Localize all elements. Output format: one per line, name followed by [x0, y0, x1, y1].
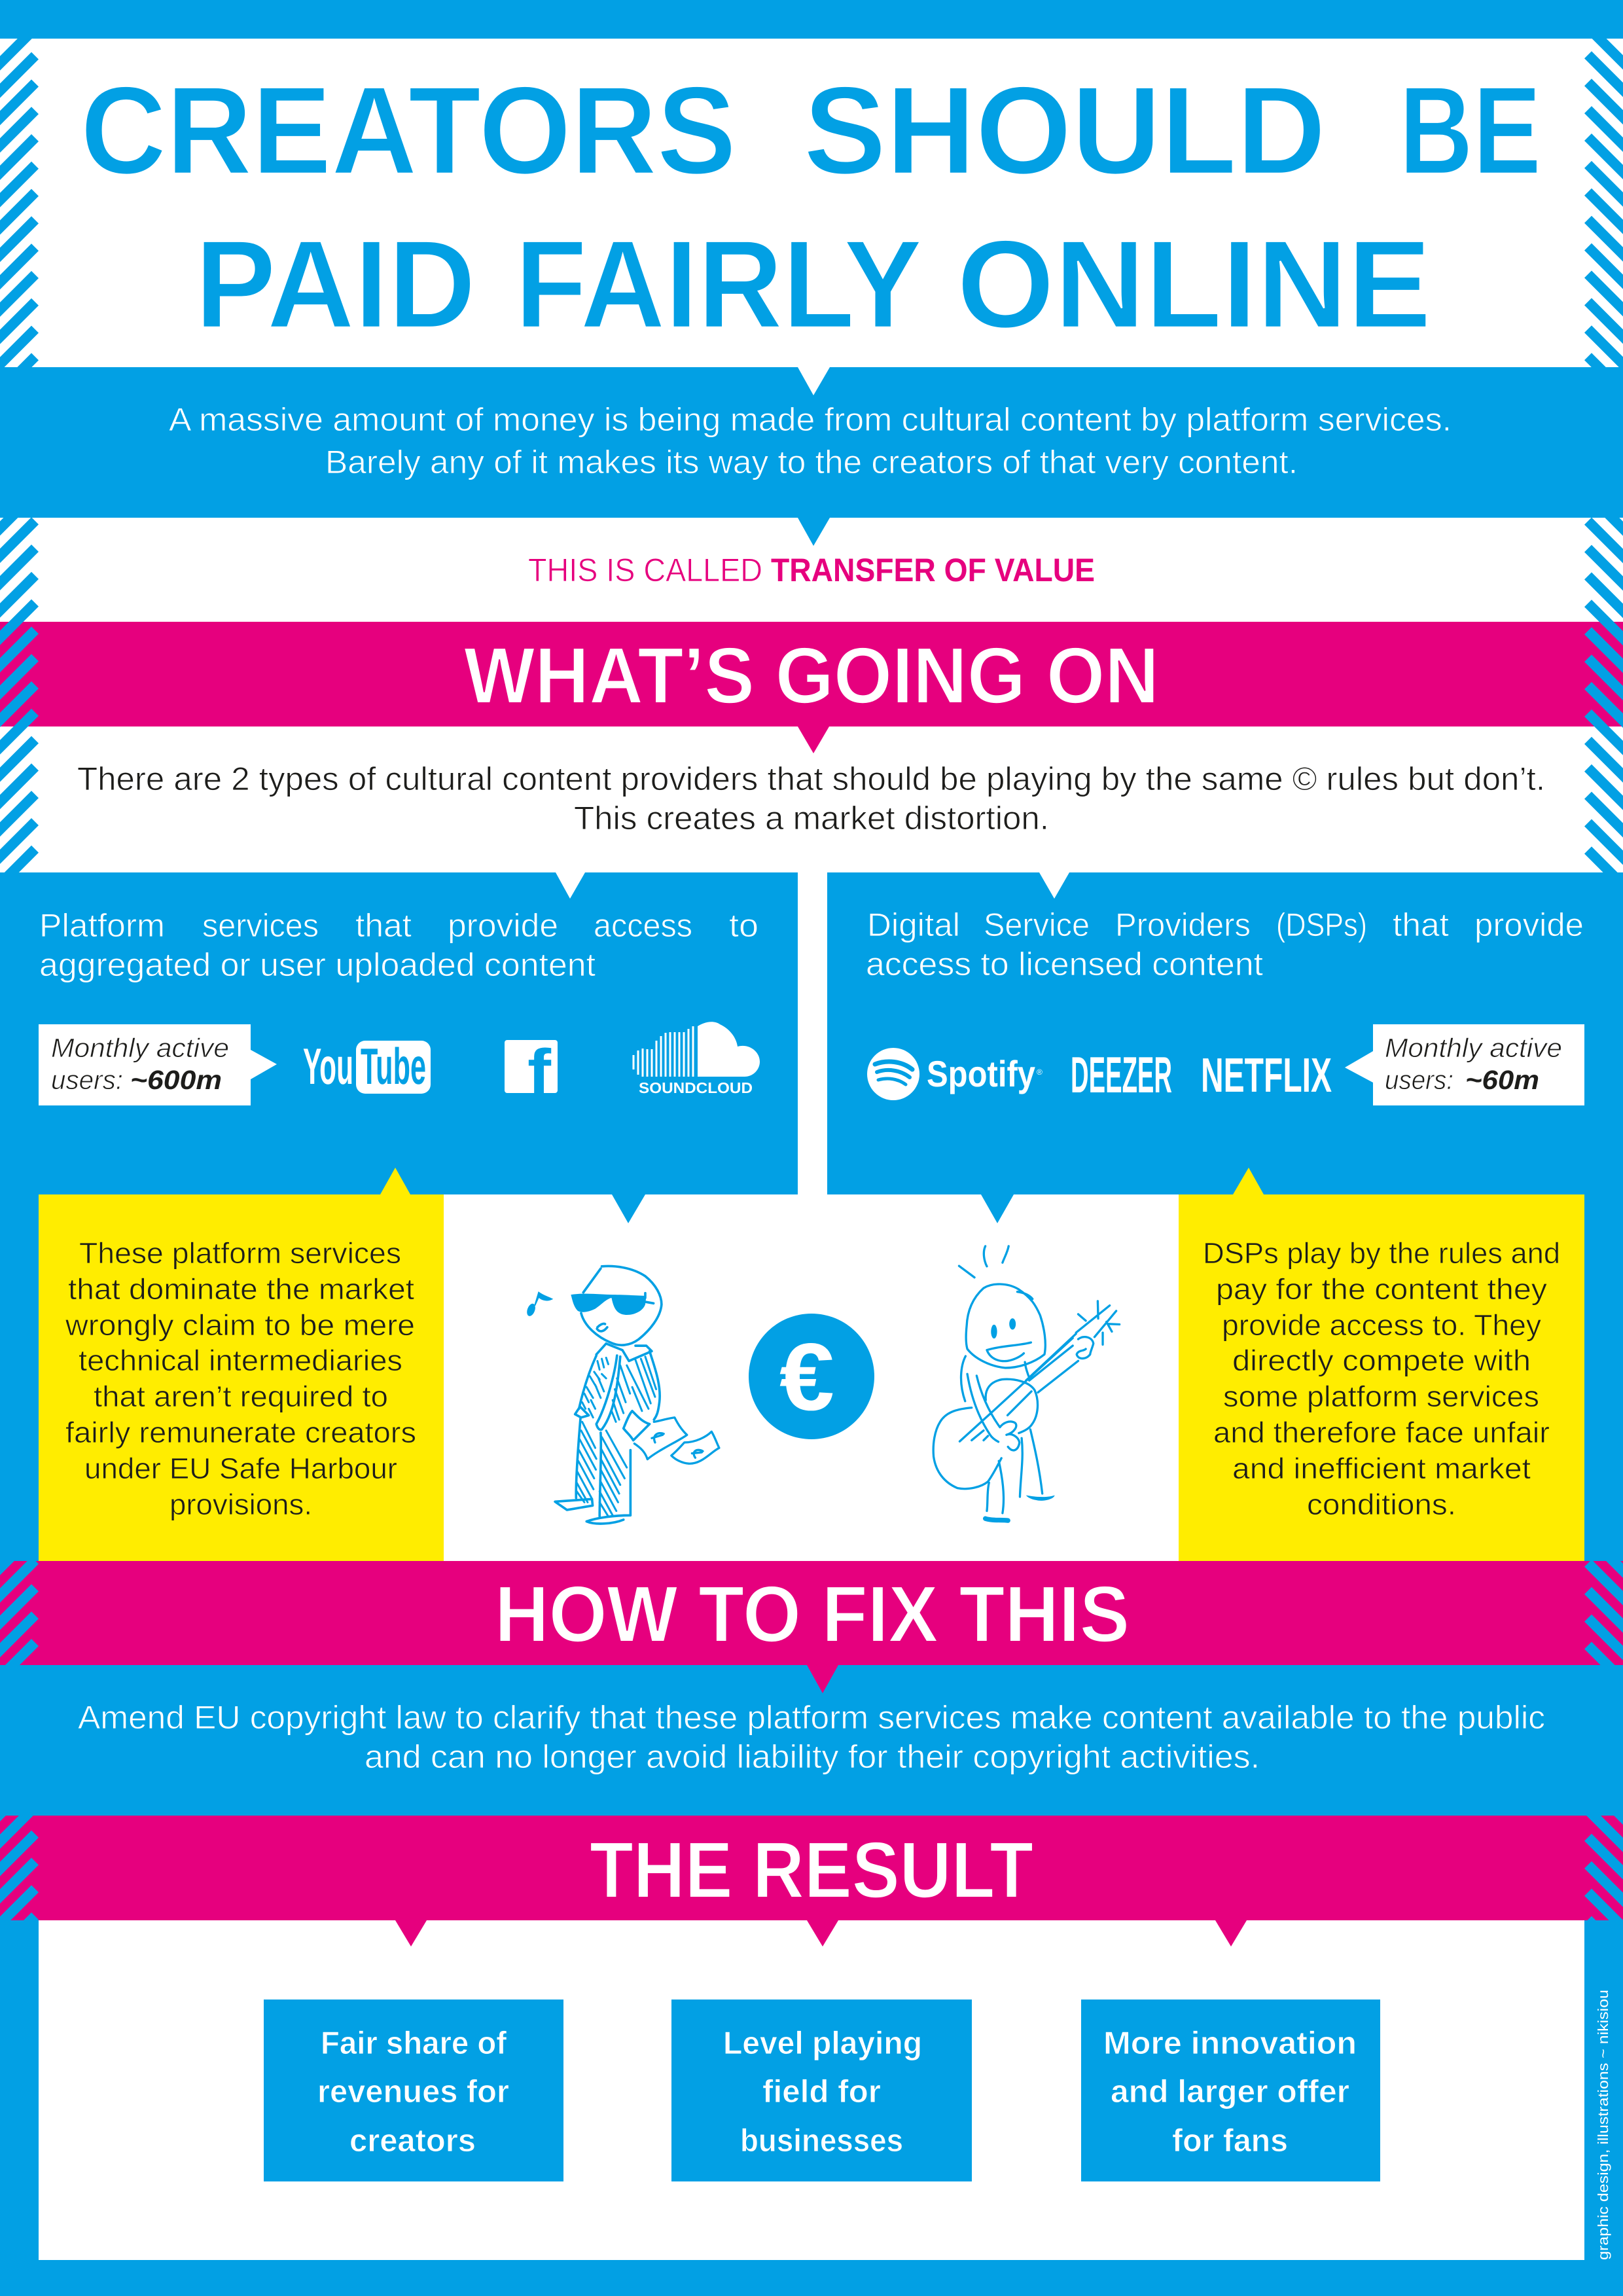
text: DSP description [866, 906, 1584, 982]
callout: monthly active users 60m: Monthly active [1385, 1033, 1562, 1063]
arrow: title notch [798, 367, 830, 395]
panel: transfer of value [0, 518, 1623, 622]
arrow: DSP to character [981, 1194, 1014, 1223]
result box: more innovation: More innovation [1103, 2026, 1357, 2061]
heading: title line 1: CREATORS [80, 61, 736, 200]
icon: facebook logo: f [527, 1037, 552, 1107]
text: two types: There are 2 types of cultural content providers that should be playing by the same © rules but don’t. [77, 761, 1545, 797]
panel: digital service providers: DEEZER [1071, 1046, 1172, 1103]
text: DSP description: Providers [1115, 906, 1251, 943]
text: platforms claim: These platform services [79, 1236, 401, 1270]
text: platform services description: services [202, 907, 319, 944]
text: DSP description: that [1393, 906, 1449, 943]
text: DSPs play by the rules [1203, 1236, 1560, 1521]
text: amend EU copyright law: and can no longer avoid liability for their copyright activities. [365, 1738, 1260, 1775]
callout: monthly active users 600m: Monthly active [51, 1033, 229, 1063]
heading: title line 2 [195, 215, 1431, 354]
result box: level playing field: businesses [740, 2123, 903, 2159]
band: what's going on [0, 622, 1623, 726]
panel: two types text [0, 726, 1623, 872]
result box: more innovation: and larger offer [1111, 2074, 1349, 2109]
text: platform services description: aggregated or user uploaded content [39, 946, 596, 983]
band: how to fix this: HOW TO FIX THIS [495, 1570, 1130, 1659]
heading: title line 1: SHOULD [804, 61, 1326, 200]
text: DSPs play by the rules: and inefficient market [1232, 1452, 1531, 1485]
icon: spotify logo: Spotify [927, 1053, 1035, 1094]
text: DSP description: (DSPs) [1276, 906, 1367, 943]
panel: centre white gap [444, 872, 1179, 1561]
heading: title line 2: ONLINE [957, 215, 1431, 354]
text: DSPs play by the rules: and therefore face unfair [1213, 1416, 1550, 1449]
text: DSPs play by the rules: DSPs play by the rules and [1203, 1236, 1560, 1270]
callout: monthly active users 600m: ~600m [130, 1065, 222, 1095]
icon: euro coin [749, 1314, 874, 1439]
panel: digital service providers [827, 872, 1623, 1194]
text: platform services description: provide [448, 907, 558, 944]
panel: intro band [0, 367, 1623, 518]
text: transfer of value [528, 552, 1095, 588]
text: platforms claim: under EU Safe Harbour [84, 1452, 397, 1485]
text: intro: Barely any of it makes its way to the creators of that very content. [325, 444, 1298, 480]
text: amend EU copyright law: Amend EU copyright law to clarify that these platform services make content available to the public [78, 1699, 1545, 1736]
panel: platform services [0, 872, 798, 1194]
result box: fair share: revenues for [317, 2074, 509, 2109]
text: DSPs play by the rules: pay for the content they [1216, 1272, 1548, 1306]
text: intro [169, 401, 1452, 480]
arrow: platform to character [612, 1194, 645, 1223]
band: what's going on: WHAT’S GOING ON [464, 631, 1159, 720]
credit line: graphic design, illustrations ~ nikisiou [1595, 1990, 1611, 2260]
callout: monthly active users 60m: ~60m [1465, 1065, 1539, 1095]
arrow: fix pointer [807, 1665, 838, 1693]
result box: level playing field: Level playing [723, 2026, 922, 2061]
icon: spotify logo [867, 1048, 1043, 1100]
text: DSP description: Service [984, 906, 1090, 943]
panel: fix text [0, 1665, 1623, 1816]
callout: monthly active users 60m [1345, 1024, 1584, 1105]
icon: facebook logo [505, 1037, 558, 1107]
arrow: result pointer two [807, 1920, 838, 1946]
result box: more innovation: for fans [1172, 2123, 1288, 2159]
text: platform services description: that [355, 907, 412, 944]
text: DSPs play by the rules: some platform services [1223, 1380, 1539, 1413]
text: platforms claim: provisions. [169, 1488, 312, 1521]
icon: soundcloud logo [633, 1022, 760, 1096]
text: platform services description [39, 907, 758, 983]
illustration: musician with guitar [933, 1246, 1120, 1520]
result box: fair share: Fair share of [321, 2026, 507, 2061]
text: DSP description: provide [1474, 906, 1584, 943]
arrow: what's going on pointer [798, 726, 829, 753]
panel: results [39, 1920, 1584, 2260]
text: transfer of value: THIS IS CALLED [528, 552, 762, 588]
text: platforms claim: that aren’t required to [94, 1380, 388, 1413]
text: DSP description: Digital [867, 906, 960, 943]
icon: soundcloud logo: SOUNDCLOUD [639, 1079, 753, 1096]
arrow: result pointer one [395, 1920, 427, 1946]
panel: title [0, 39, 1623, 367]
callout: monthly active users 600m: users: [51, 1065, 123, 1095]
panel: yellow platforms text [39, 1168, 444, 1561]
heading: title line 2: PAID [195, 215, 476, 354]
text: platform services description: to [729, 907, 758, 944]
text: two types [77, 761, 1545, 836]
text: two types: This creates a market distortion. [574, 800, 1049, 836]
text: platforms claim: wrongly claim to be mere [65, 1308, 415, 1342]
text: platforms claim [65, 1236, 416, 1521]
text: DSPs play by the rules: provide access to. They [1222, 1308, 1542, 1342]
text: amend EU copyright law [78, 1699, 1545, 1775]
arrow: yellow left up [380, 1168, 410, 1194]
text: platforms claim: that dominate the market [68, 1272, 415, 1306]
band: the result: THE RESULT [590, 1825, 1033, 1914]
text: DSPs play by the rules: conditions. [1307, 1488, 1456, 1521]
text: DSP description: access to licensed content [866, 946, 1263, 982]
arrow: yellow right up [1233, 1168, 1264, 1194]
panel: yellow DSP text [1179, 1168, 1584, 1561]
band: how to fix this [0, 1561, 1623, 1665]
arrow: result pointer three [1215, 1920, 1247, 1946]
text: intro: A massive amount of money is being made from cultural content by platform services. [169, 401, 1452, 438]
text: platforms claim: fairly remunerate creators [65, 1416, 416, 1449]
text: DSPs play by the rules: directly compete with [1232, 1344, 1531, 1377]
icon: netflix logo: NETFLIX [1201, 1048, 1332, 1102]
icon: euro coin: € [779, 1323, 834, 1430]
result box: more innovation [1081, 2000, 1380, 2181]
heading: title line 2: FAIRLY [515, 215, 922, 354]
result box: level playing field: field for [762, 2074, 881, 2109]
text: transfer of value: TRANSFER OF VALUE [771, 552, 1095, 588]
arrow: notch right [1039, 872, 1069, 899]
callout: monthly active users 60m: users: [1385, 1065, 1454, 1095]
result box: fair share: creators [349, 2123, 476, 2159]
text: platform services description: access [594, 907, 692, 944]
callout: monthly active users 600m [39, 1024, 277, 1105]
heading: title line 1: BE [1399, 61, 1541, 200]
band: the result [0, 1816, 1623, 1920]
result box: level playing field [671, 2000, 972, 2181]
heading: title line 1 [80, 61, 1541, 200]
icon: spotify logo: ® [1037, 1067, 1043, 1077]
text: platform services description: Platform [39, 907, 165, 944]
icon: youtube logo: You [303, 1037, 353, 1095]
text: platforms claim: technical intermediaries [79, 1344, 402, 1377]
icon: youtube logo: Tube [361, 1037, 426, 1095]
illustration: man in suit with money [526, 1266, 719, 1524]
result box: fair share [264, 2000, 563, 2181]
arrow: intro pointer [798, 518, 830, 546]
arrow: notch left [556, 872, 585, 899]
